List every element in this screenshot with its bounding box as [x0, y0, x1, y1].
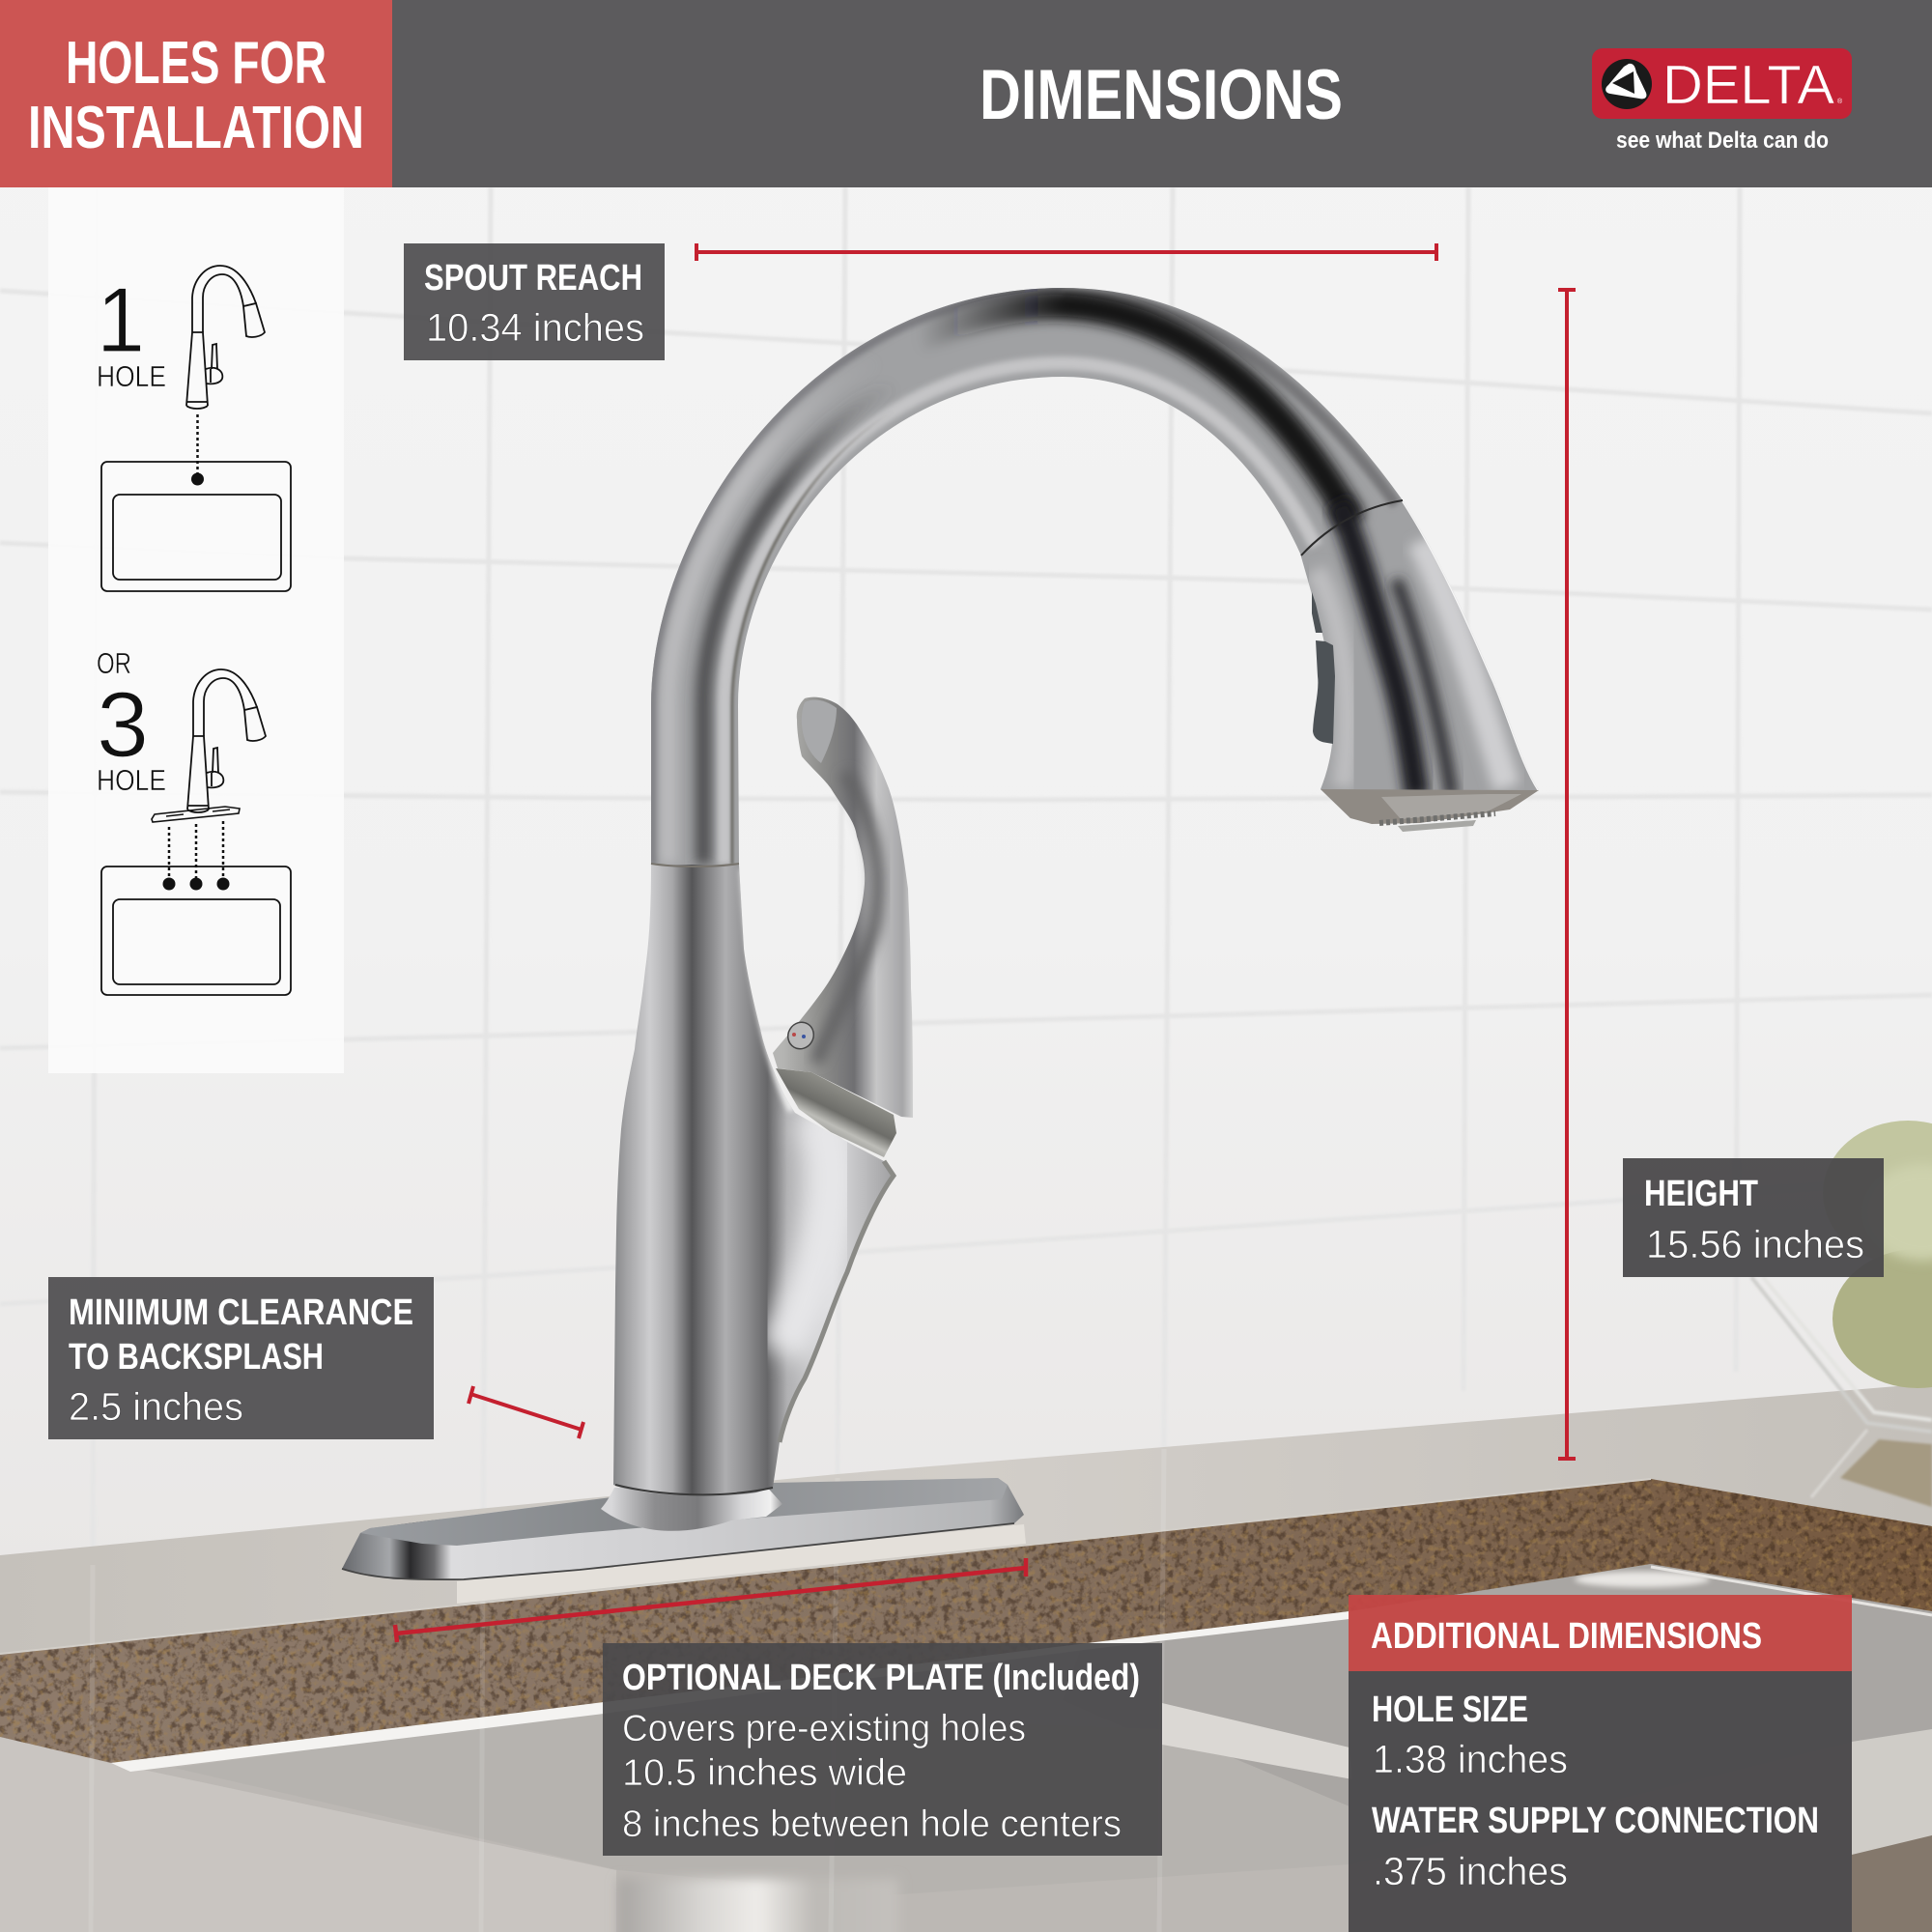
callout: spout reach: SPOUT REACH: [424, 258, 642, 298]
panel body: 1.38 inches: [1373, 1737, 1568, 1781]
head dark band: [1338, 502, 1417, 797]
icon: sink three hole: [101, 867, 291, 995]
callout: optional deck plate: Covers pre-existing holes: [622, 1708, 1026, 1749]
three hole number: OR: [97, 646, 131, 680]
faint tile reflection in counter: [91, 1449, 1164, 1932]
arrow: spout reach dimension line: [696, 243, 1436, 261]
callout: optional deck plate: [603, 1643, 1162, 1856]
glass bowl: [1751, 1277, 1932, 1507]
arrow: deck plate dimension line: [395, 1558, 1026, 1642]
spout inner thin line: [729, 421, 877, 864]
dotted guide lines: [169, 821, 223, 879]
callout: height: 15.56 inches: [1646, 1222, 1864, 1266]
callout: spout reach: [404, 243, 665, 360]
Delta logo: DELTA: [1662, 54, 1834, 116]
faucet body: [613, 865, 891, 1495]
base seam: [615, 1485, 773, 1494]
front counter: [0, 1737, 616, 1932]
hole dots: [162, 877, 230, 891]
sink drain: [618, 1879, 898, 1932]
callout: optional deck plate: 8 inches between hole centers: [622, 1804, 1122, 1845]
spray nozzle: [1321, 789, 1539, 832]
panel: holes for installation: [48, 187, 344, 1073]
one hole number: HOLE: [97, 359, 166, 393]
spout outer edge shade: [653, 291, 1063, 865]
icon: faucet, one hole: [186, 266, 265, 409]
callout: minimum clearance: MINIMUM CLEARANCE: [69, 1293, 413, 1333]
callout: minimum clearance: TO BACKSPLASH: [69, 1337, 324, 1378]
three hole number: HOLE: [97, 763, 166, 797]
spout black band: [918, 305, 1352, 522]
callout: minimum clearance: 2.5 inches: [69, 1384, 243, 1429]
handle collar ring: [776, 1068, 896, 1157]
handle dark shade: [816, 773, 878, 1063]
granite gold speckle: [0, 1479, 1932, 1763]
Delta logo: [1592, 48, 1852, 154]
header: holes for installation: [0, 0, 392, 187]
temperature dial: [783, 1017, 818, 1054]
body side fin: [780, 1161, 894, 1442]
head second band: [1396, 580, 1452, 797]
arrow: height dimension line: [1558, 290, 1576, 1459]
Delta logo: see what Delta can do: [1616, 128, 1829, 154]
panel: additional dimensions: [1349, 1595, 1852, 1932]
deck plate: [342, 1478, 1024, 1579]
spout outer right shade: [1063, 296, 1396, 504]
lower sink region: [0, 1564, 1932, 1932]
spout seam: [1301, 500, 1403, 555]
granite top edge highlight: [0, 1479, 1651, 1654]
callout: optional deck plate: 10.5 inches wide: [622, 1752, 907, 1794]
spout inner light edge: [724, 363, 1316, 865]
head right edge: [1403, 500, 1539, 790]
dotted guide line: [196, 414, 199, 474]
handle tip highlight: [802, 700, 837, 763]
title: DIMENSIONS: [980, 56, 1343, 134]
collar seam: [651, 864, 739, 867]
sink rim highlight: [111, 1611, 1350, 1772]
panel heading: [1349, 1595, 1852, 1671]
panel body: .375 inches: [1373, 1849, 1568, 1893]
handle lever: [773, 697, 913, 1118]
callout: height: [1623, 1158, 1884, 1277]
tile grout lines: [0, 187, 1932, 1565]
sink back wall: [1063, 1564, 1932, 1864]
three hole number: [97, 646, 166, 797]
header: holes for installation: HOLES FOR: [66, 30, 327, 97]
countertop surface: [0, 1383, 1932, 1654]
three hole number: 3: [97, 673, 149, 777]
logo mark: [1602, 59, 1652, 109]
callout: minimum clearance: [48, 1277, 434, 1439]
apples in bowl: [1823, 1121, 1932, 1388]
panel body: WATER SUPPLY CONNECTION: [1372, 1801, 1819, 1841]
panel heading: ADDITIONAL DIMENSIONS: [1371, 1616, 1762, 1657]
granite edge: [0, 1479, 1932, 1763]
spout: [638, 280, 1555, 869]
body edge streak: [744, 869, 792, 1111]
callout: spout reach: 10.34 inches: [426, 305, 644, 350]
header dark band: [0, 0, 1932, 187]
sink glare: [1575, 1572, 1710, 1587]
icon: deck plate: [152, 807, 240, 822]
sink divider highlight: [1162, 1703, 1352, 1779]
plate reflection: [457, 1524, 1026, 1604]
faucet photo illustration: [342, 280, 1555, 1604]
sprayer buttons: [1312, 592, 1335, 744]
callout: optional deck plate: OPTIONAL DECK PLATE (Included): [622, 1658, 1140, 1698]
icon: faucet, three hole: [187, 669, 266, 812]
spout inner dark band: [703, 384, 890, 865]
Delta logo: ®: [1837, 98, 1843, 105]
panel body: [1349, 1671, 1852, 1932]
body highlight: [782, 1111, 832, 1352]
header: holes for installation: INSTALLATION: [28, 95, 364, 161]
arrow: clearance dimension line: [469, 1386, 583, 1438]
right ledge: [1852, 1729, 1932, 1855]
head light panels: [1420, 541, 1507, 787]
faucet base collar: [601, 1483, 782, 1531]
hole dot: [191, 473, 204, 485]
spout left light band: [653, 390, 823, 865]
icon: sink one hole: [101, 462, 291, 591]
panel body: HOLE SIZE: [1372, 1690, 1528, 1730]
callout: height: HEIGHT: [1644, 1174, 1758, 1214]
one hole number: 1: [97, 269, 145, 372]
header bar: [0, 0, 1932, 187]
sink inner floor: [174, 1710, 1350, 1895]
one hole number: [97, 269, 166, 393]
granite dark speckle: [0, 1479, 1932, 1763]
